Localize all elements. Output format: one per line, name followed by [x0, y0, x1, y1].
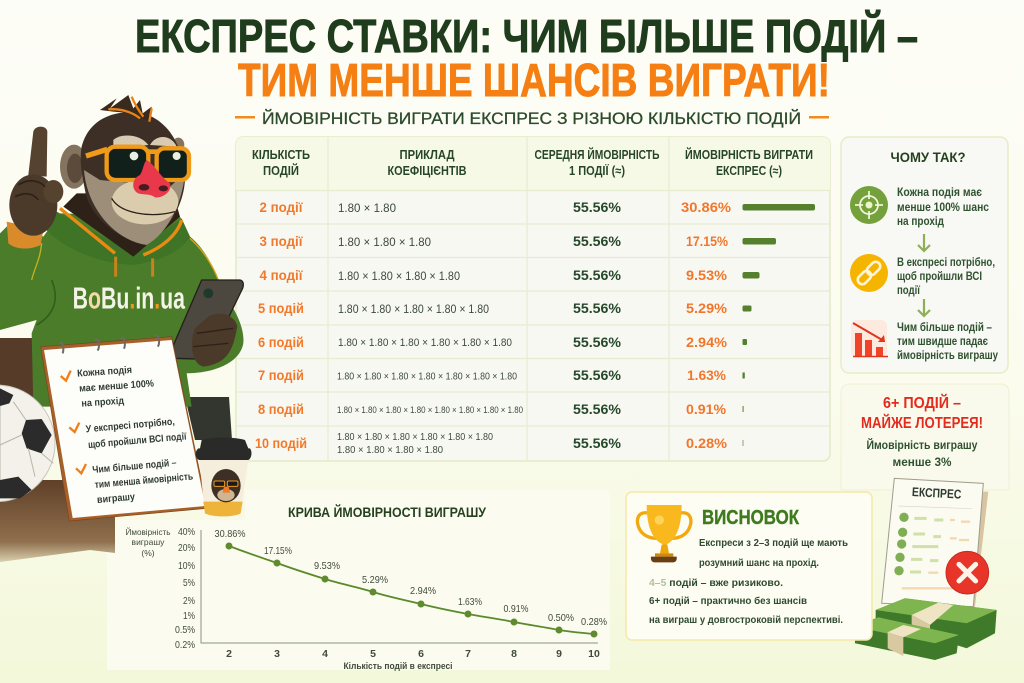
coffee cup — [196, 437, 252, 516]
illustration: express ticket and money — [854, 478, 997, 660]
row: 5 подій: 1.80 × 1.80 × 1.80 × 1.80 × 1.80 — [338, 302, 489, 316]
x axis labels: 7 — [465, 648, 471, 660]
value labels: 9.53% — [314, 560, 340, 572]
y axis labels: 0.5% — [175, 624, 195, 636]
illustration: trousers — [185, 397, 232, 440]
row: 3 події — [260, 233, 776, 249]
text: reason 1: Кожна подія має — [897, 187, 983, 199]
row: 10 подій: 1.80 × 1.80 × 1.80 × 1.80 × 1.80 × 1.80 — [337, 431, 493, 443]
row: 4 події: 9.53% — [686, 267, 728, 283]
row: 5 подій: 55.56% — [573, 300, 622, 316]
value labels: 5.29% — [362, 574, 388, 586]
x axis labels: 4 — [322, 648, 328, 660]
phone — [170, 280, 243, 359]
x axis labels — [226, 648, 600, 660]
value labels: 2.94% — [410, 585, 436, 597]
text: reason 2: щоб пройшли ВСІ — [897, 271, 982, 283]
panel: conclusion — [626, 492, 872, 640]
icon: chain link — [850, 254, 888, 292]
x axis labels: 2 — [226, 648, 232, 660]
heading: why so: ЧОМУ ТАК? — [890, 149, 966, 165]
table — [236, 137, 830, 461]
y axis title: виграшу — [132, 537, 165, 547]
panel: lottery warning — [841, 384, 1009, 490]
row: 7 подій: 55.56% — [573, 367, 622, 383]
row: 6 подій: 2.94% — [686, 334, 728, 350]
notebook rings — [59, 336, 159, 353]
arrow — [918, 299, 930, 316]
text: reason 3: Чим більше подій – — [897, 322, 993, 334]
logo on hoodie: BoBu.in.ua — [73, 281, 186, 315]
y axis labels: 1% — [183, 610, 195, 622]
value labels — [214, 528, 607, 628]
line chart — [226, 542, 598, 638]
y axis title: (%) — [141, 548, 155, 558]
row: 3 події: 55.56% — [573, 233, 622, 249]
row: 5 подій — [258, 300, 752, 316]
panel: lottery warning: менше 3% — [892, 455, 952, 469]
row: 8 подій: 0.91% — [686, 401, 727, 417]
value labels: 1.63% — [458, 596, 482, 608]
value labels: 0.50% — [548, 612, 574, 624]
x axis title: Кількість подій в експресі — [344, 661, 452, 672]
illustration: monkey mascot — [0, 95, 243, 407]
conclusion text: Експреси з 2–3 подій ще мають — [699, 537, 848, 549]
hoodie — [0, 193, 243, 407]
row: 10 подій: 0.28% — [686, 435, 728, 451]
table header: ЙМОВІРНІСТЬ ВИГРАТИ — [685, 147, 813, 162]
conclusion text: 4–5 подій – вже ризиково. — [649, 577, 783, 589]
chart title: КРИВА ЙМОВІРНОСТІ ВИГРАШУ — [288, 503, 486, 520]
conclusion text — [649, 537, 848, 626]
row: 10 подій: 1.80 × 1.80 × 1.80 × 1.80 — [337, 444, 443, 456]
row: 2 події: 1.80 × 1.80 — [338, 201, 396, 215]
row: 6 подій: 6 подій — [258, 334, 304, 350]
notebook text 3 — [76, 457, 194, 506]
table header: ПОДІЙ — [263, 163, 299, 178]
y axis labels: 5% — [183, 577, 195, 589]
notebook text 2: У експресі потрібно, — [85, 416, 175, 435]
nose — [133, 160, 170, 197]
row: 4 події — [260, 267, 760, 283]
subtitle: ЙМОВІРНІСТЬ ВИГРАТИ ЕКСПРЕС З РІЗНОЮ КІЛЬКІСТЮ ПОДІЙ — [262, 109, 801, 128]
row: 6 подій: 55.56% — [573, 334, 622, 350]
text: reason 3 — [897, 322, 998, 362]
conclusion text: розумний шанс на прохід. — [699, 557, 819, 569]
row: 7 подій: 1.63% — [687, 367, 727, 383]
icon: target — [850, 186, 888, 224]
conclusion text: 6+ подій – практично без шансів — [649, 595, 808, 607]
head — [60, 95, 185, 245]
text: reason 3: ймовірність виграшу — [897, 350, 998, 362]
notebook text 3: виграшу — [97, 492, 136, 506]
icon: back money stack — [876, 598, 997, 648]
row: 6 подій: 1.80 × 1.80 × 1.80 × 1.80 × 1.80 × 1.80 — [338, 337, 512, 349]
illustration: chair — [0, 338, 45, 400]
icon: falling chart — [851, 320, 888, 357]
table header: 1 ПОДІЇ (≈) — [569, 163, 625, 178]
title — [135, 10, 918, 106]
conclusion text: на виграш у довгостроковій перспективі. — [649, 614, 843, 626]
panel: lottery warning: Ймовірність виграшу — [866, 437, 978, 452]
notebook text 1: має менше 100% — [79, 378, 154, 395]
row: 10 подій: 55.56% — [573, 435, 622, 451]
table header: ЕКСПРЕС (≈) — [716, 164, 782, 178]
table header: ПРИКЛАД — [400, 148, 455, 162]
text: reason 2: події — [897, 285, 921, 297]
row: 2 події — [260, 199, 815, 215]
notebook text 2 — [69, 416, 187, 451]
sunglasses — [86, 147, 189, 180]
row: 7 подій: 1.80 × 1.80 × 1.80 × 1.80 × 1.80 × 1.80 × 1.80 — [337, 370, 517, 382]
y axis labels: 10% — [178, 560, 195, 572]
table header: КОЕФІЦІЄНТІВ — [388, 164, 466, 178]
y axis labels: 20% — [178, 542, 195, 554]
value labels: 0.28% — [581, 616, 607, 628]
row: 2 події: 55.56% — [573, 199, 622, 215]
icon: red cross — [946, 551, 989, 594]
value labels: 17.15% — [264, 545, 292, 557]
row: 7 подій — [258, 367, 745, 383]
illustration: soccer ball — [0, 385, 55, 502]
row: 3 події: 1.80 × 1.80 × 1.80 — [338, 235, 431, 249]
arrow — [918, 234, 930, 251]
x axis labels: 9 — [556, 648, 562, 660]
y axis labels: 0.2% — [175, 639, 195, 651]
y axis title: Ймовірність — [126, 526, 171, 537]
x axis labels: 8 — [511, 648, 517, 660]
y axis labels: 2% — [183, 595, 195, 607]
y axis title — [126, 526, 171, 558]
text: reason 1: на прохід — [897, 216, 945, 228]
notebook text 1 — [61, 365, 154, 410]
y axis labels — [175, 526, 195, 651]
x axis labels: 5 — [370, 648, 376, 660]
table header: СЕРЕДНЯ ЙМОВІРНІСТЬ — [534, 147, 660, 162]
title: ТИМ МЕНШЕ ШАНСІВ ВИГРАТИ! — [238, 54, 830, 106]
row: 4 події: 4 події — [260, 267, 304, 283]
row: 8 подій: 1.80 × 1.80 × 1.80 × 1.80 × 1.80 × 1.80 × 1.80 × 1.80 — [337, 405, 523, 416]
value labels: 30.86% — [214, 528, 246, 540]
text: reason 2 — [897, 257, 995, 297]
heading: conclusion: ВИСНОВОК — [702, 507, 800, 529]
icon: front money stack — [854, 617, 959, 660]
row: 3 події: 17.15% — [686, 233, 728, 249]
x axis labels: 10 — [588, 648, 600, 660]
panel: curve chart — [107, 490, 610, 672]
panel: why so — [841, 137, 1008, 373]
row: 8 подій: 55.56% — [573, 401, 622, 417]
icon: monkey logo on cup — [211, 469, 241, 502]
row: 4 події: 1.80 × 1.80 × 1.80 × 1.80 — [338, 269, 460, 283]
row: 2 події: 30.86% — [681, 199, 732, 215]
panel: lottery warning: 6+ ПОДІЙ – — [883, 394, 961, 412]
illustration: express ticket and money: ЕКСПРЕС — [912, 485, 962, 502]
panel: lottery warning: МАЙЖЕ ЛОТЕРЕЯ! — [861, 414, 983, 432]
x axis labels: 3 — [274, 648, 280, 660]
row: 2 події: 2 події — [260, 199, 304, 215]
row: 7 подій: 7 подій — [258, 367, 304, 383]
table header — [236, 137, 830, 190]
hand with phone — [192, 314, 237, 367]
row: 3 події: 3 події — [260, 233, 304, 249]
row: 6 подій — [258, 334, 747, 350]
notebook text 1: на прохід — [81, 396, 125, 410]
x axis labels: 6 — [418, 648, 424, 660]
row: 5 подій: 5 подій — [258, 300, 304, 316]
text: reason 1 — [897, 187, 990, 228]
notebook — [41, 336, 207, 521]
row: 10 подій — [255, 431, 744, 456]
notebook text 3: тим менша ймовірність — [94, 471, 194, 491]
value labels: 0.91% — [504, 603, 528, 615]
raised hand — [7, 127, 63, 249]
text: reason 1: менше 100% шанс — [897, 202, 990, 214]
row: 4 події: 55.56% — [573, 267, 622, 283]
illustration: wooden desk — [0, 480, 115, 562]
table header: КІЛЬКІСТЬ — [252, 148, 310, 162]
icon: trophy — [637, 505, 691, 562]
text: reason 3: тим швидше падає — [897, 336, 989, 348]
row: 8 подій — [258, 401, 744, 417]
row: 5 подій: 5.29% — [686, 300, 728, 316]
row: 8 подій: 8 подій — [258, 401, 304, 417]
notebook text 3: Чим більше подій – — [92, 457, 177, 476]
notebook text 1: Кожна подія — [77, 365, 133, 380]
notebook text 2: щоб пройшли ВСІ події — [88, 430, 187, 451]
row: 10 подій: 10 подій — [255, 435, 307, 451]
text: reason 2: В експресі потрібно, — [897, 257, 995, 269]
y axis labels: 40% — [178, 526, 195, 538]
